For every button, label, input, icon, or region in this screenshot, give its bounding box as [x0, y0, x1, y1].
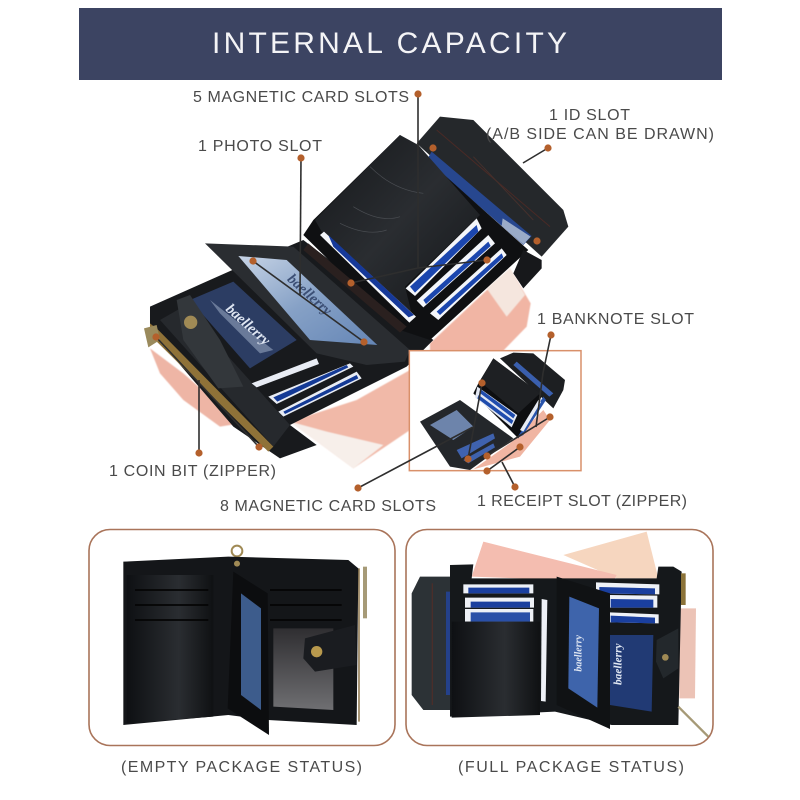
inset right cards — [517, 397, 546, 438]
empty wallet photo — [123, 546, 367, 735]
main wallet photo — [144, 117, 568, 468]
inset lower leaf — [420, 400, 513, 470]
full wallet photo: baellerry — [574, 634, 585, 672]
label: 1 coin bit: 1 COIN BIT (ZIPPER) — [109, 463, 276, 480]
panel: empty package — [89, 530, 395, 746]
label: 8 magnetic card slots: 8 MAGNETIC CARD SLOTS — [220, 498, 436, 515]
caption: empty: (EMPTY PACKAGE STATUS) — [121, 759, 362, 776]
inset box — [409, 351, 581, 471]
title: INTERNAL CAPACITY — [212, 27, 567, 60]
inset lower cards — [457, 433, 495, 463]
label: 1 id slot: 1 ID SLOT — [549, 107, 630, 124]
inset id strip — [513, 362, 553, 397]
callout lines and dots — [152, 90, 555, 492]
header banner — [79, 8, 722, 80]
label: 1 photo slot: 1 PHOTO SLOT — [198, 138, 322, 155]
top flap — [417, 117, 568, 257]
banknotes — [150, 268, 531, 468]
inset top panel — [480, 358, 540, 413]
label: 1 banknote slot: 1 BANKNOTE SLOT — [537, 311, 694, 328]
full wallet photo: baellerry — [613, 643, 625, 685]
upper leaf — [303, 135, 528, 340]
photo flap: baellerry — [284, 271, 335, 319]
lower leaf — [144, 240, 433, 458]
inset banknotes — [473, 410, 550, 469]
strap under — [513, 250, 542, 288]
caption: full: (FULL PACKAGE STATUS) — [458, 759, 684, 776]
lower leaf: baellerry — [222, 301, 273, 349]
label: 1 receipt slot: 1 RECEIPT SLOT (ZIPPER) — [477, 493, 687, 510]
snap strap — [177, 295, 243, 388]
upper card slots — [320, 218, 507, 323]
inset window — [430, 410, 473, 440]
full wallet photo — [412, 532, 708, 737]
label: a/b side: (A/B SIDE CAN BE DRAWN) — [486, 126, 714, 143]
label: 5 magnetic card slots: 5 MAGNETIC CARD SLOTS — [193, 89, 409, 106]
inset fold — [473, 358, 542, 438]
panel: full package — [406, 530, 713, 746]
inset left cards — [475, 387, 517, 427]
inset flap — [500, 353, 565, 408]
photo flap — [205, 243, 410, 365]
lower card slots — [252, 358, 362, 417]
